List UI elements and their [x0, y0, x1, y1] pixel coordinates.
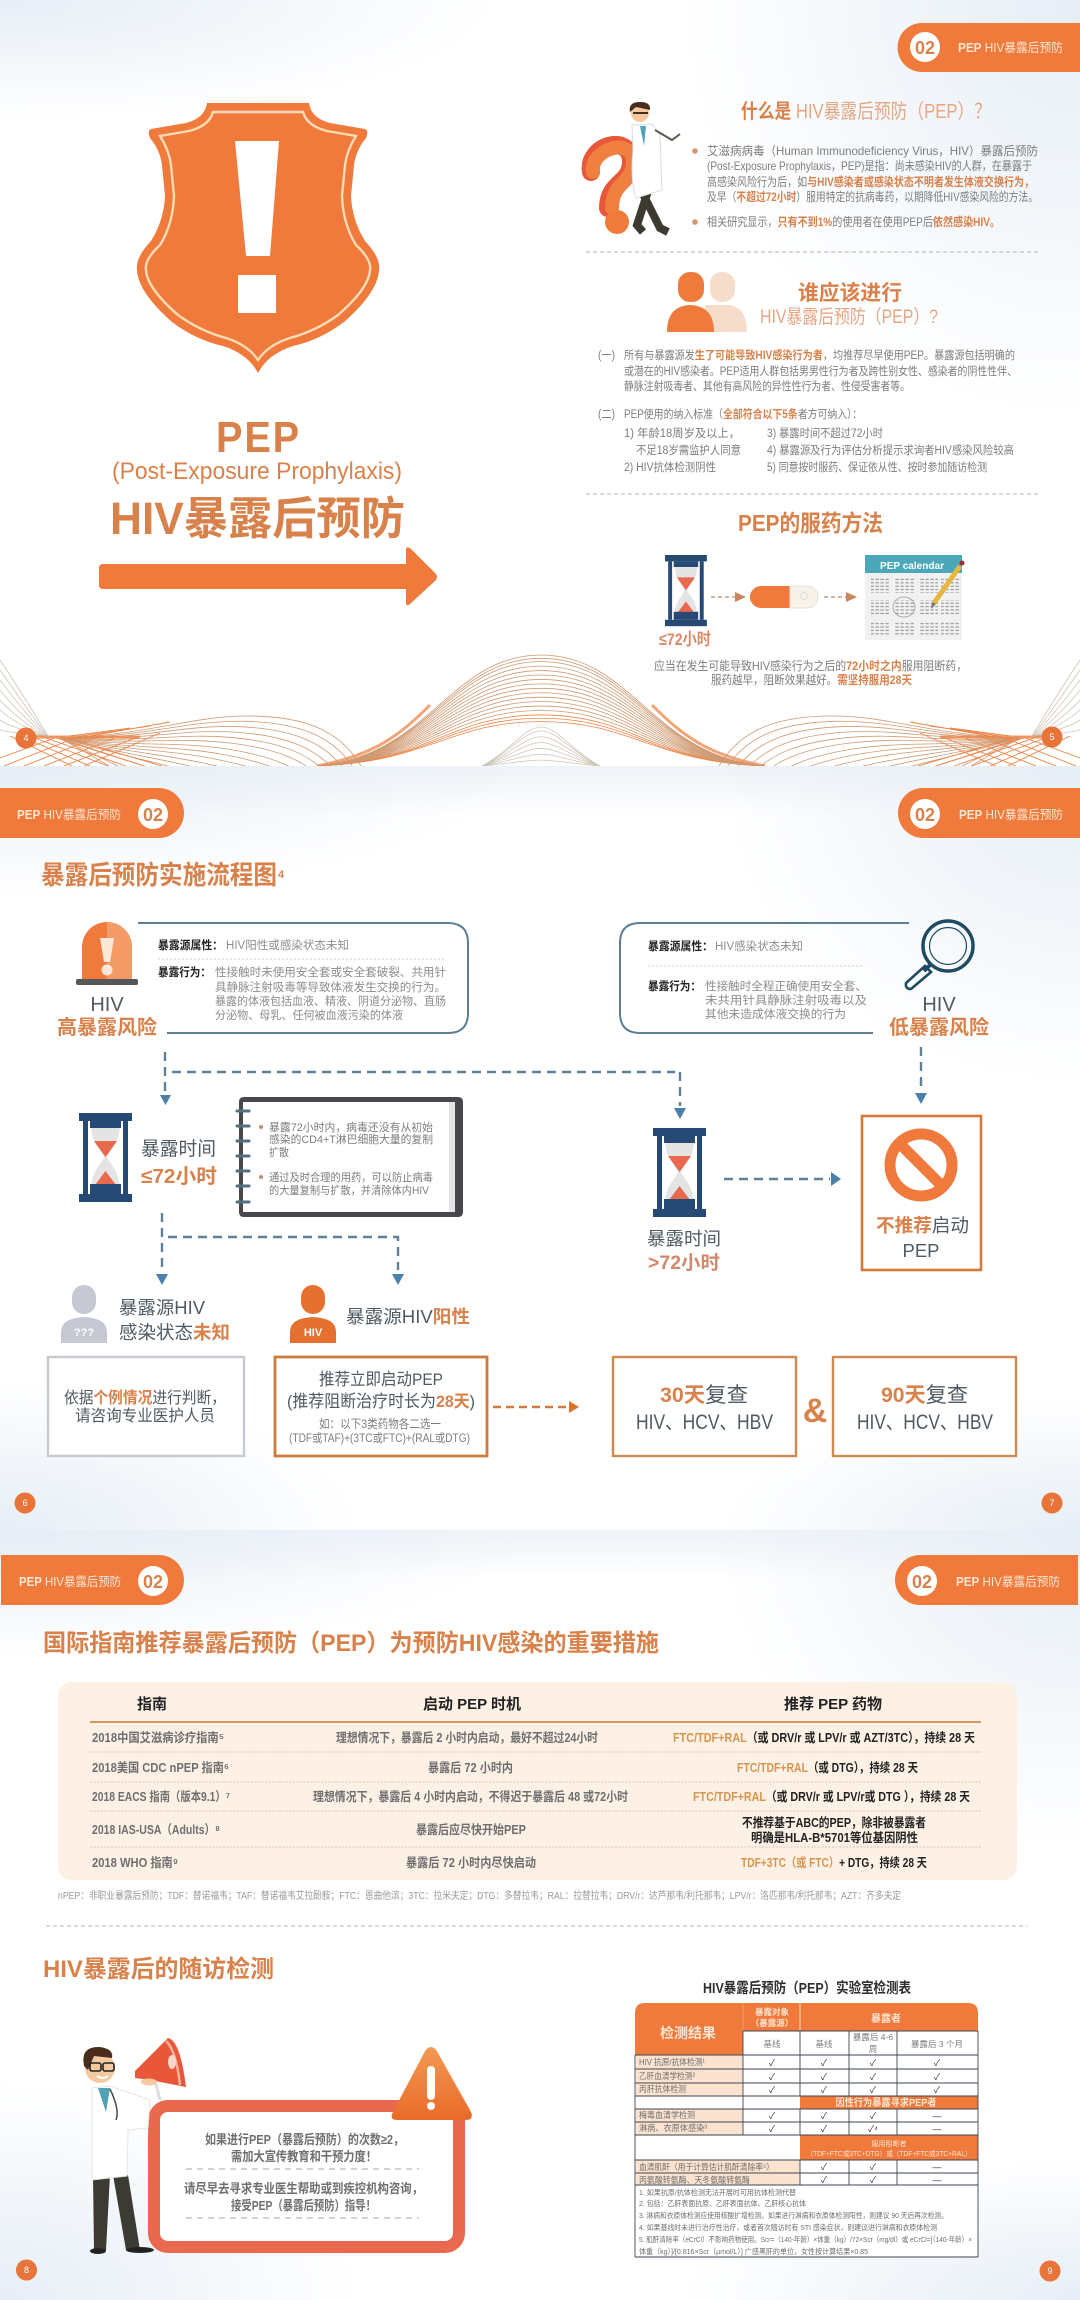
panel: warning callout: 接受PEP（暴露后预防）指导！ — [231, 2198, 376, 2213]
row: 2018 IAS-USA: 不推荐基于ABC的PEP，除非被暴露者 — [742, 1815, 926, 1830]
heading: 谁应该进行: HIV暴露后预防（PEP）? — [760, 306, 938, 328]
section tab: top right — [898, 23, 1080, 72]
arrow: capsule to calendar — [824, 592, 857, 602]
footnote: abbreviations: nPEP：非职业暴露后预防；TDF：替诺福韦；TAF：替诺福韦艾拉酚胺；FTC：恩曲他滨；3TC：拉米夫定；DTG：多替拉韦；RAL：拉替拉韦；DRV/r：达芦那韦/利托那韦；LPV/r：洛匹那韦/利托那韦；AZT：齐多夫定 — [58, 1889, 901, 1902]
check marks: ✓ — [769, 2111, 776, 2121]
sub header: 暴露后 4-6 — [853, 2032, 893, 2042]
panel: low risk exposure: 其他未造成体液交换的行为 — [705, 1007, 846, 1021]
text block: who should take PEP: 所有与暴露源发生了可能导致HIV感染行为者，均推荐尽早使用PEP。暴露源包括明确的 — [624, 348, 1015, 362]
section tab: right, guidelines — [895, 1555, 1078, 1605]
title: HIV暴露后预防: HIV暴露后预防 — [110, 493, 405, 544]
heading: 谁应该进行 — [760, 281, 938, 328]
panel: start PEP immediately: (TDF或TAF)+(3TC或FTC)+(RAL或DTG) — [289, 1432, 470, 1445]
icon: unknown person: ??? — [74, 1327, 94, 1339]
icon: hourglass ≤72小时: ≤72小时 — [659, 630, 711, 649]
row: 2018 IAS-USA: 2018 IAS-USA（Adults）⁸ — [92, 1823, 220, 1837]
table header band — [635, 2003, 978, 2055]
page number 7: 7 — [1049, 1498, 1055, 1508]
panel: warning callout — [154, 2106, 459, 2247]
check marks: ✓ — [870, 2175, 877, 2185]
icon: two people — [667, 272, 747, 332]
section tab: left, flow chart: PEP HIV暴露后预防 — [17, 807, 121, 822]
panel: 90-day follow-up — [833, 1357, 1016, 1456]
row: 2018 CDC: 2018美国 CDC nPEP 指南⁶ — [92, 1760, 229, 1775]
sub header: 基线 — [763, 2039, 781, 2049]
check marks: ✓⁴ — [868, 2124, 878, 2134]
arrow: big orange right arrow — [99, 547, 437, 605]
icon: warning triangle — [392, 2047, 472, 2120]
label: 感染状态未知: 暴露源HIV — [119, 1298, 205, 1318]
check marks: — — [932, 2111, 942, 2121]
check marks: — — [932, 2175, 942, 2185]
row labels: 梅毒血清学检测 — [639, 2110, 695, 2120]
row: 2018 EACS: 理想情况下，暴露后 4 小时内启动，不得迟于暴露后 48 或72小时 — [313, 1789, 628, 1804]
row labels: 丙肝抗体检测 — [639, 2084, 686, 2094]
table notes: 2. 包括：乙肝表面抗原、乙肝表面抗体、乙肝核心抗体 — [639, 2198, 806, 2208]
text block: who should take PEP: PEP使用的纳入标准（全部符合以下5条者方可纳入）： — [624, 407, 862, 421]
text block: who should take PEP: 静脉注射吸毒者、其他有高风险的异性性行为者、性侵受害者等。 — [624, 379, 910, 393]
arrow: low risk down — [915, 1047, 927, 1104]
row labels — [639, 2057, 774, 2185]
table notes: 1. 如果抗原/抗体检测无法开展时可用抗体检测代替 — [639, 2187, 796, 2197]
arrow: high risk branching — [160, 1052, 686, 1119]
doctor legs — [90, 2175, 154, 2254]
panel: not recommended: 不推荐启动 — [876, 1215, 969, 1236]
text block: when to take PEP: 应当在发生可能导致HIV感染行为之后的72小时之内服用阻断药， — [654, 658, 967, 673]
section tab: right, guidelines: PEP HIV暴露后预防 — [956, 1574, 1060, 1589]
text block: who should take PEP: 2) HIV抗体检测阴性 — [624, 460, 716, 474]
row: 2018 WHO — [92, 1855, 927, 1870]
decorative waves at bottom of first panel — [0, 654, 1080, 766]
heading: HIV暴露后的随访检测: HIV暴露后的随访检测 — [43, 1955, 274, 1983]
page number 8 — [16, 2260, 37, 2280]
section tab: left, guidelines: 02 — [143, 1572, 163, 1592]
icon: magnifier — [906, 921, 973, 989]
label: 感染状态未知: 感染状态未知 — [119, 1322, 230, 1343]
icon: capsule — [750, 586, 818, 608]
page number 5 — [1042, 726, 1062, 748]
doctor figure — [630, 102, 680, 232]
row: 2018 EACS: 2018 EACS 指南（版本9.1）⁷ — [92, 1789, 230, 1804]
text block: who should take PEP: 5) 同意按时服药、保证依从性、按时参加随访检测 — [767, 460, 987, 474]
check marks: ✓ — [821, 2072, 828, 2082]
table header band: （暴露源） — [751, 2018, 793, 2028]
check marks: ✓ — [821, 2058, 828, 2068]
panel: high risk exposure: HIV阳性或感染状态未知 — [226, 938, 349, 952]
check marks: — — [932, 2124, 942, 2134]
text block: definition of PEP — [692, 143, 1038, 229]
page number 4 — [16, 728, 36, 748]
panel: warning callout: 如果进行PEP（暴露后预防）的次数≥2， — [205, 2132, 404, 2147]
panel: high risk exposure: 暴露的体液包括血液、精液、阴道分泌物、直肠 — [215, 994, 446, 1008]
page number 9: 9 — [1047, 2266, 1053, 2276]
doctor coat — [92, 2086, 150, 2180]
panel: high risk exposure: 性接触时未使用安全套或安全套破裂、共用针 — [215, 965, 446, 979]
icon: hourglass ≤72小时 — [659, 555, 711, 649]
row: 2018 WHO: TDF+3TC（或 FTC）+ DTG，持续 28 天 — [741, 1855, 927, 1870]
label: 暴露时间 ≤72小时: 暴露时间 — [141, 1138, 216, 1160]
label: HIV 低暴露风险 — [889, 994, 989, 1039]
label: 感染状态未知 — [119, 1298, 230, 1343]
section tab: top right: 02 — [915, 38, 935, 58]
panel: warning callout: 需加大宣传教育和干预力度！ — [231, 2149, 377, 2164]
check marks: ✓ — [870, 2072, 877, 2082]
sub header: 周 — [869, 2044, 877, 2054]
text block: who should take PEP: 3) 暴露时间不超过72小时 — [767, 426, 883, 440]
check marks: — — [932, 2162, 942, 2172]
text block: who should take PEP: 1) 年龄18周岁及以上， — [624, 426, 740, 440]
text block: definition of PEP: 高感染风险行为后，如与HIV感染者或感染状态不明者发生体液交换行为， — [707, 174, 1034, 189]
check marks: ✓ — [821, 2175, 828, 2185]
panel: warning callout: 请尽早去寻求专业医生帮助或到疾控机构咨询， — [184, 2181, 423, 2196]
section tab: right, flow chart: PEP HIV暴露后预防 — [959, 807, 1063, 822]
section tab: left, flow chart: 02 — [143, 805, 163, 825]
arrow: 72 hours branching — [156, 1213, 404, 1285]
section tab: right, guidelines: 02 — [912, 1572, 932, 1592]
panel: 30-day follow-up: 30天复查 — [660, 1384, 748, 1407]
panel: notebook: 通过及时合理的用药，可以防止病毒 — [269, 1170, 433, 1184]
panel: low risk exposure — [620, 923, 909, 1033]
panel: low risk exposure: 性接触时全程正确使用安全套、 — [705, 979, 867, 993]
label: 暴露时间 ≤72小时 — [141, 1138, 217, 1188]
panel: notebook — [237, 1097, 463, 1217]
icon: HIV positive person: HIV — [304, 1327, 323, 1339]
heading: PEP的服药方法: PEP的服药方法 — [738, 510, 883, 536]
panel: 30-day follow-up: HIV、HCV、HBV — [636, 1411, 773, 1434]
panel: low risk exposure: 未共用针具静脉注射吸毒以及 — [705, 993, 868, 1007]
check marks: ✓ — [934, 2085, 941, 2095]
row labels: 血清肌酐（用于计算估计肌酐清除率⁵） — [639, 2162, 774, 2172]
check marks: ✓ — [870, 2162, 877, 2172]
section tab: left, flow chart — [0, 788, 184, 838]
heading: 国际指南推荐: 国际指南推荐暴露后预防（PEP）为预防HIV感染的重要措施 — [43, 1629, 659, 1657]
panel: consult professional: 请咨询专业医护人员 — [75, 1407, 215, 1425]
table header: 指南 — [137, 1695, 167, 1713]
panel: 90-day follow-up: HIV、HCV、HBV — [857, 1411, 993, 1434]
panel: start PEP immediately: 如：以下3类药物各二选一 — [319, 1416, 441, 1431]
row: 2018 IAS-USA: 明确是HLA-B*5701等位基因阴性 — [751, 1830, 918, 1845]
panel: start PEP immediately: 推荐立即启动PEP — [319, 1370, 443, 1389]
label: HIV 高暴露风险: HIV — [90, 994, 124, 1016]
page number 7 — [1042, 1492, 1062, 1514]
doctor head — [83, 2047, 115, 2083]
row: 2018 IAS-USA: 暴露后应尽快开始PEP — [416, 1822, 526, 1837]
icon: alarm light — [76, 922, 138, 985]
label: HIV 高暴露风险 — [57, 994, 157, 1039]
icon: PEP calendar — [865, 555, 964, 640]
panel: high risk exposure — [138, 923, 468, 1033]
sub header — [763, 2032, 963, 2054]
illustration: doctor with question mark — [591, 102, 680, 234]
text block: definition of PEP: 艾滋病病毒（Human Immunodeficiency Virus，HIV）暴露后预防 — [707, 143, 1038, 158]
row: 2018 China: FTC/TDF+RAL（或 DRV/r 或 LPV/r 或 AZT/3TC），持续 28 天 — [673, 1730, 975, 1745]
heading: PEP — [110, 413, 405, 544]
table header: 推荐 PEP 药物 — [784, 1695, 882, 1713]
check marks: ✓ — [821, 2162, 828, 2172]
check marks: ✓ — [934, 2072, 941, 2082]
label: 暴露时间 >72小时 — [647, 1229, 721, 1274]
panel: low risk exposure: 暴露行为： — [648, 979, 701, 993]
text block: who should take PEP — [598, 348, 1017, 474]
check marks: ✓ — [821, 2124, 828, 2134]
text block: who should take PEP: (一) — [598, 350, 615, 362]
page number 6 — [14, 1492, 36, 1514]
row: 2018 EACS: FTC/TDF+RAL（或 DRV/r 或 LPV/r或 DTG ），持续 28 天 — [693, 1789, 970, 1804]
row: 2018 China: 2018中国艾滋病诊疗指南⁵ — [92, 1730, 224, 1745]
subtitle: Post-Exposure Prophylaxis: (Post-Exposure Prophylaxis) — [112, 458, 402, 485]
orange sub bands — [800, 2096, 978, 2160]
table header band: 暴露者 — [871, 2012, 901, 2025]
row: 2018 EACS — [92, 1789, 970, 1804]
check marks — [769, 2058, 942, 2185]
section tab: left, guidelines: PEP HIV暴露后预防 — [19, 1574, 121, 1589]
panel: not recommended: PEP — [902, 1240, 940, 1261]
check marks: ✓ — [821, 2085, 828, 2095]
icon: hourglass left — [79, 1113, 132, 1202]
orange sub bands: （TDF+FTC或3TC+DTG）或（TDF+FTC或3TC+RAL） — [806, 2149, 972, 2158]
panel: notebook: 暴露72小时内，病毒还没有从初始 — [269, 1120, 433, 1134]
panel: 90-day follow-up: 90天复查 — [881, 1384, 968, 1407]
table notes: 体重（kg）]/[0.816×Scr（μmol/L）] 广感黑肝的单位，女性按计算结果×0.85 — [639, 2246, 868, 2256]
panel: low risk exposure: HIV感染状态未知 — [715, 939, 803, 953]
section tab: left, guidelines — [1, 1555, 184, 1605]
panel: 30-day follow-up — [613, 1357, 796, 1456]
panel: consult professional: 依据个例情况进行判断， — [64, 1388, 226, 1407]
section tab: right, flow chart: 02 — [915, 805, 935, 825]
exclamation mark — [235, 141, 279, 313]
row: 2018 WHO: 2018 WHO 指南⁹ — [92, 1855, 178, 1870]
table header — [90, 1695, 981, 1722]
row: 2018 IAS-USA — [92, 1815, 926, 1845]
label: 暴露时间 ≤72小时: ≤72小时 — [141, 1165, 217, 1188]
panel: low risk exposure: 暴露源属性： — [648, 939, 713, 953]
heading: 暴露后预防实施流程图: 暴露后预防实施流程图 — [41, 860, 277, 890]
panel: notebook: 感染的CD4+T淋巴细胞大量的复制 — [269, 1132, 433, 1146]
illustration: doctor with megaphone — [83, 2038, 186, 2254]
label: HIV 低暴露风险: HIV — [922, 994, 956, 1016]
row labels: 丙氨酸转氨酶、天冬氨酸转氨酶 — [639, 2175, 750, 2185]
check marks: ✓ — [769, 2058, 776, 2068]
row: 2018 CDC: FTC/TDF+RAL（或 DTG），持续 28 天 — [737, 1760, 918, 1775]
label: 暴露源HIV阳性: 暴露源HIV阳性 — [346, 1307, 470, 1327]
table header band: 检测结果 — [660, 2025, 716, 2041]
arrow: to follow-up — [493, 1401, 579, 1413]
icon: hourglass right — [653, 1128, 706, 1217]
panel: start PEP immediately — [275, 1357, 487, 1456]
orange sub bands: 因性行为暴露寻求PEP者 — [836, 2096, 936, 2109]
page number 9 — [1040, 2260, 1060, 2282]
question mark — [591, 145, 633, 234]
panel: consult professional — [48, 1357, 244, 1456]
heading: 什么是 HIV暴露后预防（PEP）？: 什么是 HIV暴露后预防（PEP）？ — [741, 100, 991, 123]
check marks: ✓ — [870, 2058, 877, 2068]
text block: who should take PEP: (二) — [598, 409, 615, 421]
row: 2018 CDC — [92, 1760, 918, 1775]
icon: unknown person — [61, 1285, 107, 1343]
text block: when to take PEP: 服药越早，阻断效果越好。需坚持服用28天 — [711, 672, 912, 687]
panel: notebook: 扩散 — [269, 1145, 289, 1159]
icon: HIV positive person — [290, 1285, 336, 1343]
check marks: ✓ — [769, 2085, 776, 2095]
section tab: top right: PEP HIV暴露后预防 — [958, 40, 1063, 55]
icon: prohibited sign — [890, 1134, 952, 1196]
row labels: 乙肝血清学检测² — [639, 2071, 695, 2081]
heading: lab test table title: HIV暴露后预防（PEP）实验室检测表 — [703, 1979, 911, 1997]
label: HIV 低暴露风险: 低暴露风险 — [889, 1015, 989, 1039]
heading: 谁应该进行: 谁应该进行 — [798, 281, 902, 305]
superscript 4: 4 — [278, 869, 285, 881]
table notes: 3. 淋病和衣原体检测应使用核酸扩增检测。如果进行淋病和衣原体检测阳性，则建议 90 天后再次检测。 — [639, 2210, 948, 2220]
text block: when to take PEP — [654, 658, 967, 687]
text block: who should take PEP: 不足18岁需监护人同意 — [636, 443, 741, 457]
grid lines — [635, 2031, 978, 2257]
icon: PEP calendar: PEP calendar — [880, 560, 944, 572]
page number 4: 4 — [23, 733, 29, 743]
table notes: 5. 肌酐清除率（eCrCl）不影响药物使用。Scr=（140-年龄）×体重（kg）/72×Scr（mg/dl）或 eCrCl=[（140-年龄）× — [639, 2234, 972, 2244]
check marks: ✓ — [769, 2124, 776, 2134]
panel: high risk exposure: 暴露源属性： — [158, 938, 223, 952]
row: 2018 WHO: 暴露后 72 小时内尽快启动 — [406, 1855, 536, 1870]
page number 8: 8 — [24, 2265, 29, 2275]
table header band: 暴露对象 — [755, 2007, 789, 2017]
text block: who should take PEP: 或潜在的HIV感染者。PEP适用人群包括男男性行为者及跨性别女性、感染者的阴性性伴、 — [624, 364, 1017, 378]
table notes — [639, 2187, 972, 2256]
orange sub bands: 服用阻断者 — [872, 2139, 906, 2148]
table header: 启动 PEP 时机 — [423, 1696, 521, 1713]
table: guideline recommendations — [58, 1682, 1017, 1880]
table notes: 4. 如果基线时未进行治疗性治疗，或者首次随访时有 STI 感染症状，则建议进行淋病和衣原体检测 — [639, 2222, 937, 2232]
panel: high risk exposure: 暴露行为： — [158, 965, 211, 979]
panel: notebook: 的大量复制与扩散，并清除体内HIV — [269, 1183, 430, 1197]
panel: start PEP immediately: (推荐阻断治疗时长为28天) — [287, 1392, 475, 1411]
check marks: ✓ — [870, 2085, 877, 2095]
arrow: hourglass to capsule — [711, 592, 746, 602]
sub header: 基线 — [815, 2039, 833, 2049]
check marks: ✓ — [769, 2072, 776, 2082]
row: 2018 China — [92, 1730, 975, 1745]
text block: definition of PEP: 相关研究显示，只有不到1%的使用者在使用PEP后依然感染HIV。 — [707, 214, 1000, 229]
table: lab tests — [635, 2003, 978, 2257]
panel: not recommended — [862, 1116, 981, 1270]
arrow: >72 hours to not recommended — [724, 1172, 841, 1186]
row labels: 淋病、衣原体感染³ — [639, 2123, 707, 2133]
row: 2018 China: 理想情况下，暴露后 2 小时内启动，最好不超过24小时 — [336, 1730, 598, 1745]
sub header: 暴露后 3 个月 — [911, 2039, 963, 2049]
icon: warning shield — [137, 103, 379, 373]
section tab: right, flow chart — [898, 788, 1080, 838]
text block: who should take PEP: 4) 暴露源及行为评估分析提示求询者HIV感染风险较高 — [767, 443, 1014, 457]
megaphone — [135, 2038, 186, 2100]
panel: high risk exposure: 具静脉注射吸毒等导致体液发生交换的行为。 — [215, 980, 446, 994]
row: 2018 CDC: 暴露后 72 小时内 — [428, 1760, 513, 1775]
row label cells — [636, 2055, 800, 2185]
label: 暴露时间 >72小时: >72小时 — [648, 1252, 720, 1274]
check marks: ✓ — [934, 2058, 941, 2068]
heading: PEP: PEP — [216, 413, 301, 462]
check marks: ✓ — [870, 2111, 877, 2121]
page number 5: 5 — [1049, 732, 1055, 742]
check marks: ✓ — [821, 2111, 828, 2121]
page number 6: 6 — [22, 1498, 28, 1508]
symbol: ampersand: & — [803, 1392, 827, 1430]
row labels: HIV 抗原/抗体检测¹ — [639, 2057, 705, 2067]
label: HIV 高暴露风险: 高暴露风险 — [57, 1015, 157, 1039]
panel: high risk exposure: 分泌物、母乳、任何被血液污染的体液 — [215, 1008, 403, 1022]
label: 暴露时间 >72小时: 暴露时间 — [647, 1229, 721, 1249]
